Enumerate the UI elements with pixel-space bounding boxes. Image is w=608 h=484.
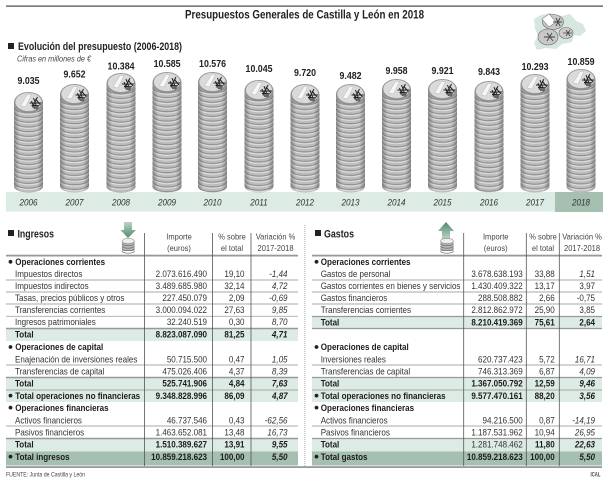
row: inversiones reales: 620.737.423 <box>478 354 523 365</box>
row: gastos financieros: 288.508.882 <box>478 292 523 303</box>
coin stack 2017: 10.293 <box>522 61 549 73</box>
row: total capital: 12,59 <box>535 378 555 389</box>
row: activos financieros: -14,19 <box>572 415 595 426</box>
row: total financieras: Total <box>15 439 34 450</box>
row: inversiones reales: Inversiones reales <box>321 354 386 365</box>
row: gastos financieros: 2,66 <box>539 292 555 303</box>
panel: gastos <box>312 222 602 466</box>
row: gastos de personal <box>321 268 595 279</box>
row: activos financieros: 46.737.546 <box>167 415 207 426</box>
row: impuestos directos: 2.073.616.490 <box>156 268 207 279</box>
table header: gastos: (euros) <box>484 244 508 253</box>
coin stack 2016: 9.843 <box>478 66 501 78</box>
row: total operaciones no financieras: Total operaciones no financieras <box>15 390 140 401</box>
row: total corrientes: 8.210.419.369 <box>471 317 523 328</box>
row: transferencias de capital: Transferencias de capital <box>15 366 105 377</box>
row: gastos financieros: -0,75 <box>577 292 595 303</box>
row: transferencias corrientes <box>321 304 595 315</box>
coin stack 2012: 2012 <box>295 197 314 208</box>
row: total financieras: 11,80 <box>535 439 555 450</box>
panel: evolución del presupuesto <box>6 42 603 212</box>
table header: gastos: el total <box>532 244 554 253</box>
coin stack 2013: 9.482 <box>339 70 362 82</box>
coin stack 2013: 2013 <box>341 197 360 208</box>
coin stack 2017 <box>520 61 550 219</box>
row: impuestos directos: -1,44 <box>269 268 288 279</box>
row: total operaciones no financieras <box>315 390 595 401</box>
row: total operaciones no financieras: 4,87 <box>271 390 289 401</box>
table: ingresos rows <box>6 256 298 466</box>
title: Presupuestos Generales de Castilla y León en 2018 <box>185 10 425 22</box>
coin stack 2017: 2017 <box>525 197 545 208</box>
row: impuestos directos: 19,10 <box>224 268 245 279</box>
row: pasivos financieros: 16,73 <box>267 427 288 438</box>
row: transferencias corrientes: 3,85 <box>579 304 595 315</box>
year band <box>6 192 603 212</box>
row: total ingresos: 100,00 <box>220 451 245 462</box>
row: tasas: Tasas, precios públicos y otros <box>15 292 124 303</box>
row: total financieras: Total <box>321 439 339 450</box>
row: total capital <box>15 378 288 389</box>
row: transferencias de capital: 8,39 <box>272 366 288 377</box>
coin stack 2015: 9.921 <box>432 65 454 77</box>
heading: gastos: Gastos <box>324 228 354 240</box>
row: enajenación: 1,05 <box>272 354 288 365</box>
row: total capital: 9,46 <box>579 378 595 389</box>
row: total corrientes: Total <box>321 317 339 328</box>
table: gastos rows <box>312 256 602 466</box>
row: impuestos indirectos: 3.489.685.980 <box>156 280 207 291</box>
coin stack 2006 <box>14 77 43 206</box>
table header: gastos: Variación % <box>562 232 602 242</box>
row: enajenación <box>15 354 288 365</box>
row: total financieras: 9,55 <box>272 439 288 450</box>
row: total corrientes <box>321 317 595 328</box>
section: operaciones financieras: Operaciones financieras <box>15 402 109 413</box>
row: ingresos patrimoniales: Ingresos patrimoniales <box>15 316 96 327</box>
row: total financieras: 22,63 <box>574 439 595 450</box>
row: total capital: 7,63 <box>272 378 288 389</box>
row: activos financieros: -62,56 <box>265 415 288 426</box>
row: transferencias corrientes: 3.000.094.022 <box>156 304 207 315</box>
row: gastos corrientes en bienes y servicios: 3,97 <box>579 280 595 291</box>
coin stack 2006: 2006 <box>19 197 38 208</box>
coin stack 2009 <box>152 58 182 217</box>
row: total financieras: 1.510.389.627 <box>156 439 207 450</box>
row: pasivos financieros: 13,48 <box>224 427 245 438</box>
coin stack 2006: 9.035 <box>18 75 40 87</box>
section: operaciones corrientes: Operaciones corrientes <box>15 256 105 267</box>
row: impuestos indirectos <box>15 280 288 291</box>
coin stack 2008: 2008 <box>111 197 130 208</box>
table header: ingresos: Variación % <box>256 232 295 242</box>
row: total corrientes: 75,61 <box>535 317 555 328</box>
row: pasivos financieros <box>15 427 288 438</box>
row: transferencias de capital <box>15 366 288 377</box>
coin stack 2013 <box>336 72 365 206</box>
row: total operaciones no financieras: 86,09 <box>224 390 245 401</box>
row: total operaciones no financieras: 9.577.470.161 <box>471 390 523 401</box>
coin stack 2018 <box>566 56 596 214</box>
table header: ingresos <box>166 232 295 253</box>
subtitle: units: Cifras en millones de € <box>17 54 92 64</box>
table header: ingresos: Importe <box>166 232 192 242</box>
row: transferencias de capital: 4,09 <box>579 366 595 377</box>
row: activos financieros: Activos financieros <box>321 415 388 426</box>
row: total capital: Total <box>321 378 339 389</box>
row: total capital: 1.367.050.792 <box>471 378 523 389</box>
coin stack 2009: 10.585 <box>154 58 181 70</box>
row: gastos corrientes en bienes y servicios <box>321 280 595 291</box>
row: inversiones reales <box>321 354 595 365</box>
table header: gastos <box>483 232 602 253</box>
table header: ingresos: % sobre <box>218 232 246 242</box>
coin stack 2012 <box>290 69 320 206</box>
row: gastos financieros: Gastos financieros <box>321 292 387 303</box>
icon: map of Castilla y León with coins <box>534 13 586 50</box>
heading: ingresos <box>8 228 54 240</box>
coin stack 2011: 10.045 <box>246 63 273 75</box>
row: total corrientes <box>15 329 288 340</box>
coin stack 2007: 2007 <box>65 197 85 208</box>
coin stack 2018: 2018 <box>571 197 590 208</box>
row: transferencias corrientes: Transferencias corrientes <box>321 304 411 315</box>
row: total corrientes: 4,71 <box>271 329 288 340</box>
icon: down arrow into coins <box>120 222 136 253</box>
row: total gastos <box>315 451 595 462</box>
row: total gastos: Total gastos <box>321 451 368 462</box>
row: transferencias corrientes <box>15 304 288 315</box>
row shading: gastos <box>312 280 602 466</box>
row: transferencias de capital: 746.313.369 <box>478 366 523 377</box>
row: ingresos patrimoniales <box>15 316 288 327</box>
row: gastos corrientes en bienes y servicios: Gastos corrientes en bienes y servicios <box>321 280 460 291</box>
row: transferencias de capital <box>321 366 595 377</box>
coin stack 2009: 2009 <box>157 197 176 208</box>
coin stack 2012: 9.720 <box>294 67 316 79</box>
row: pasivos financieros <box>321 427 595 438</box>
row: total capital: 4,84 <box>229 378 245 389</box>
row: total ingresos: 10.859.218.623 <box>151 451 207 462</box>
row: impuestos directos: Impuestos directos <box>15 268 82 279</box>
row: gastos de personal: 33,88 <box>535 268 555 279</box>
row: enajenación: Enajenación de inversiones reales <box>15 354 137 365</box>
row: total corrientes: 8.823.087.090 <box>156 329 207 340</box>
row: tasas: -0,69 <box>269 292 288 303</box>
row: enajenación: 50.715.500 <box>167 354 207 365</box>
row: total operaciones no financieras: 3,56 <box>579 390 595 401</box>
row: transferencias corrientes: Transferencias corrientes <box>15 304 105 315</box>
row: pasivos financieros: Pasivos financieros <box>321 427 390 438</box>
row: total capital: 525.741.906 <box>162 378 207 389</box>
row: total operaciones no financieras: 88,20 <box>535 390 555 401</box>
table header: ingresos: (euros) <box>167 244 191 253</box>
section: operaciones financieras: Operaciones financieras <box>321 402 414 413</box>
heading: ingresos: Ingresos <box>18 228 54 240</box>
heading: evolución del presupuesto: Evolución del presupuesto (2006-2018) <box>18 41 182 53</box>
row: total capital <box>321 378 595 389</box>
icon: up arrow out of coins <box>438 222 454 253</box>
coin stack 2014: 9.958 <box>386 65 408 77</box>
row: impuestos indirectos: Impuestos indirectos <box>15 280 89 291</box>
row: tasas: 227.450.079 <box>162 292 207 303</box>
row: transferencias de capital: 6,87 <box>539 366 555 377</box>
row: total corrientes: 81,25 <box>224 329 245 340</box>
section: operaciones corrientes: Operaciones corrientes <box>321 256 411 267</box>
coin stack 2018: 10.859 <box>568 56 595 68</box>
coin stack 2015 <box>428 67 457 206</box>
row: transferencias corrientes: 25,90 <box>535 304 555 315</box>
row: total ingresos: 5,50 <box>272 451 288 462</box>
row: activos financieros <box>321 415 595 426</box>
coin stack 2014 <box>382 67 411 206</box>
row: transferencias corrientes: 2.812.862.972 <box>471 304 523 315</box>
coin stack 2007 <box>60 70 89 206</box>
row: tasas <box>15 292 288 303</box>
row shading: ingresos <box>6 280 298 466</box>
heading: gastos <box>315 228 354 240</box>
row: total financieras: 1.281.748.462 <box>471 439 523 450</box>
row: total corrientes: 2,64 <box>579 317 595 328</box>
coin stack 2007: 9.652 <box>63 69 86 81</box>
row: pasivos financieros: 1.187.531.962 <box>471 427 523 438</box>
coin stack 2008 <box>106 61 136 218</box>
table header: gastos: % sobre <box>529 232 557 242</box>
row: total operaciones no financieras: Total operaciones no financieras <box>321 390 446 401</box>
row: impuestos directos <box>15 268 288 279</box>
row: activos financieros: 94.216.500 <box>483 415 523 426</box>
credit: ICAL: ICAL <box>590 471 601 478</box>
row: gastos de personal: Gastos de personal <box>321 268 390 279</box>
row: total gastos: 10.859.218.623 <box>467 451 523 462</box>
section: operaciones de capital: Operaciones de capital <box>321 341 409 352</box>
row: gastos de personal: 3.678.638.193 <box>471 268 523 279</box>
coin stack 2010: 10.576 <box>199 58 227 70</box>
row: transferencias de capital: 475.026.406 <box>162 366 207 377</box>
row: activos financieros: Activos financieros <box>15 415 82 426</box>
row: total financieras <box>15 439 288 450</box>
row: transferencias corrientes: 9,85 <box>272 304 288 315</box>
row: ingresos patrimoniales: 0,30 <box>229 316 245 327</box>
table header: ingresos: el total <box>221 244 243 253</box>
row: total gastos: 5,50 <box>579 451 595 462</box>
row: pasivos financieros: 1.463.652.081 <box>156 427 207 438</box>
row: gastos de personal: 1,51 <box>579 268 595 279</box>
row: activos financieros: 0,43 <box>229 415 245 426</box>
row: ingresos patrimoniales: 8,70 <box>272 316 288 327</box>
row: gastos financieros <box>321 292 595 303</box>
coin stack 2016: 2016 <box>479 197 498 208</box>
coin stack 2010: 2010 <box>203 197 222 208</box>
coin stack 2015: 2015 <box>433 197 452 208</box>
row: total ingresos: Total ingresos <box>15 451 70 462</box>
panel: ingresos <box>6 222 298 466</box>
coin stack 2011 <box>244 65 274 206</box>
row: total gastos: 100,00 <box>530 451 555 462</box>
coin stack 2011: 2011 <box>249 197 268 208</box>
row: total corrientes: Total <box>15 329 34 340</box>
source note: FUENTE: Junta de Castilla y León <box>6 471 85 478</box>
row: impuestos indirectos: 4,72 <box>272 280 288 291</box>
row: ingresos patrimoniales: 32.240.519 <box>167 316 207 327</box>
coin stack 2010 <box>198 58 227 217</box>
row: pasivos financieros: Pasivos financieros <box>15 427 84 438</box>
table header: gastos: Importe <box>483 232 509 242</box>
row: total operaciones no financieras: 9.348.828.996 <box>156 390 207 401</box>
section: operaciones de capital: Operaciones de capital <box>15 341 103 352</box>
row: total financieras <box>321 439 595 450</box>
row: transferencias corrientes: 27,63 <box>224 304 245 315</box>
row: total ingresos <box>9 451 288 462</box>
row: activos financieros <box>15 415 288 426</box>
row: total capital: Total <box>15 378 34 389</box>
row: total operaciones no financieras <box>9 390 289 401</box>
table header: gastos: 2017-2018 <box>564 244 600 253</box>
row: total financieras: 13,91 <box>224 439 245 450</box>
row: gastos corrientes en bienes y servicios: 13,17 <box>535 280 555 291</box>
row: transferencias de capital: Transferencias de capital <box>321 366 410 377</box>
row: activos financieros: 0,87 <box>539 415 555 426</box>
row: pasivos financieros: 26,95 <box>574 427 595 438</box>
row: inversiones reales: 16,71 <box>575 354 595 365</box>
coin stack 2016 <box>474 68 504 206</box>
row: gastos corrientes en bienes y servicios: 1.430.409.322 <box>471 280 523 291</box>
coin stack 2008: 10.384 <box>108 61 135 73</box>
row: inversiones reales: 5,72 <box>539 354 555 365</box>
table header: ingresos: 2017-2018 <box>258 244 294 253</box>
row: impuestos indirectos: 32,14 <box>224 280 245 291</box>
row: enajenación: 0,47 <box>229 354 245 365</box>
coin stack 2014: 2014 <box>387 197 406 208</box>
row: pasivos financieros: 10,94 <box>535 427 555 438</box>
row: transferencias de capital: 4,37 <box>229 366 245 377</box>
row: tasas: 2,09 <box>229 292 245 303</box>
